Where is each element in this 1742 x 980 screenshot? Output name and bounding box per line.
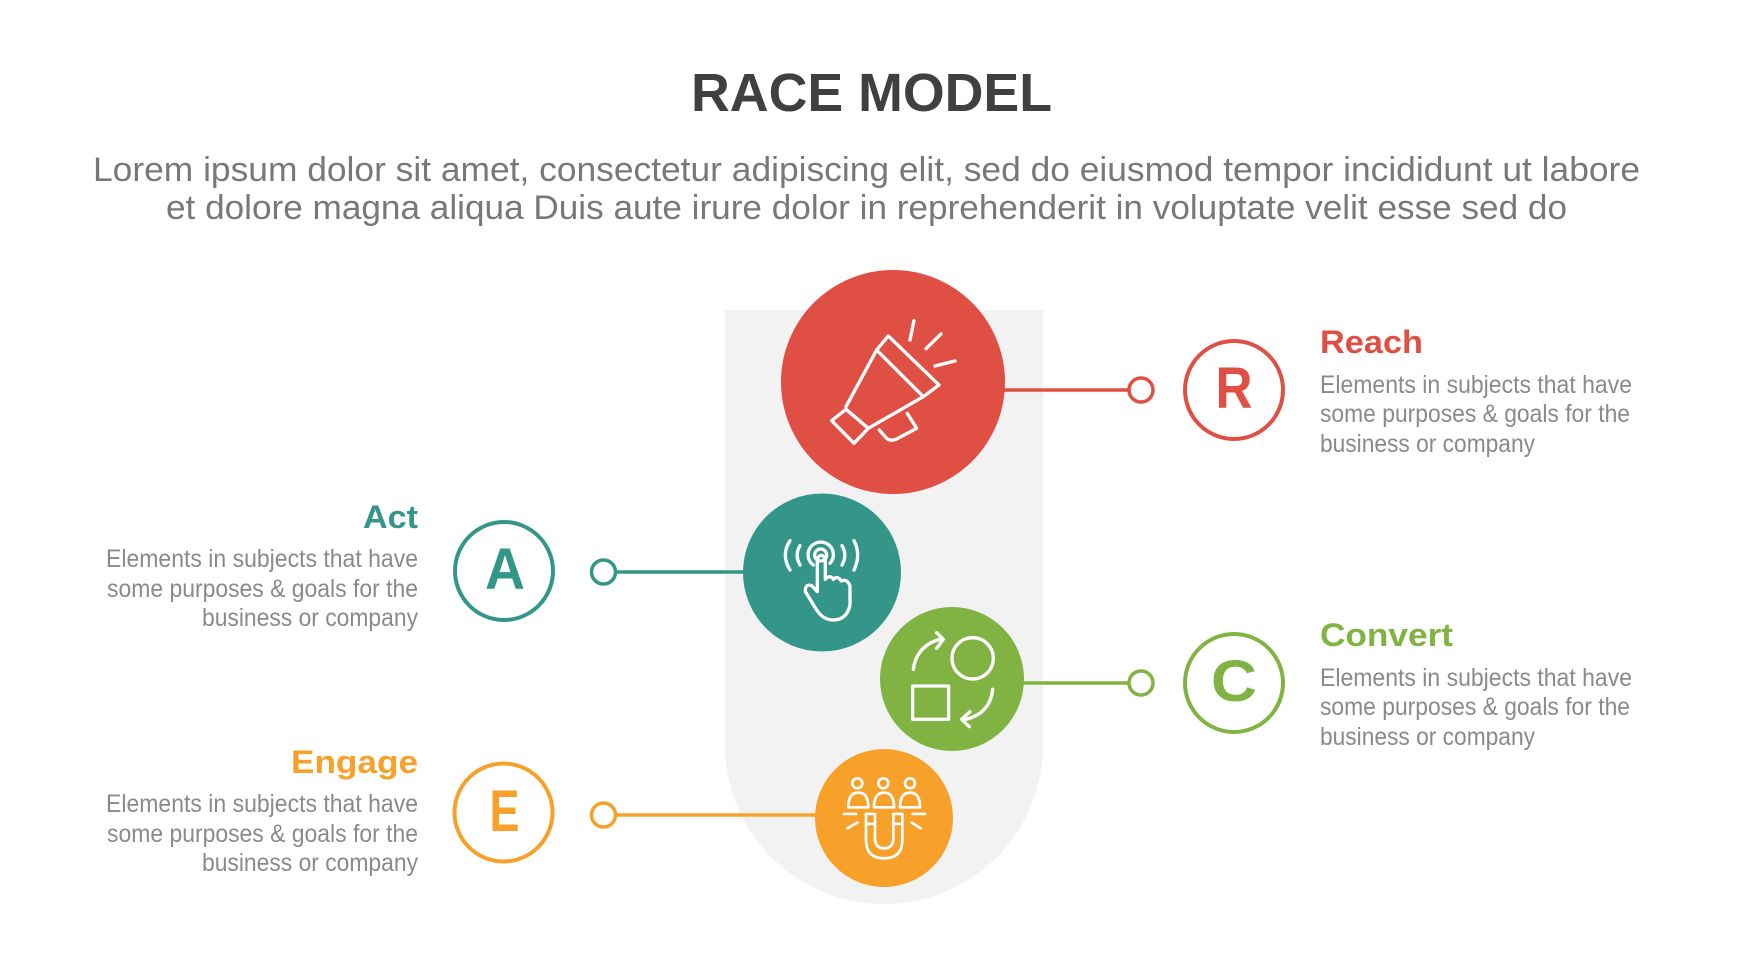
description: Act: business or company — [202, 604, 418, 632]
connector: convert — [1023, 671, 1153, 695]
letter badge: C — [1185, 634, 1283, 732]
description: Convert: some purposes & goals for the — [1320, 693, 1630, 721]
step: Act — [106, 494, 901, 652]
step: Convert — [880, 607, 1632, 751]
description: Engage: Elements in subjects that have — [106, 790, 418, 818]
letter badge: A: A — [485, 537, 525, 602]
icon: tap hand — [785, 541, 858, 620]
connector: engage — [592, 803, 816, 827]
description: Engage: some purposes & goals for the — [107, 820, 418, 848]
description: Convert: business or company — [1320, 723, 1535, 751]
description: Reach — [1320, 371, 1632, 458]
description: Act: some purposes & goals for the — [107, 575, 418, 603]
icon: shapes with cycle arrows — [913, 633, 993, 727]
subtitle text — [93, 151, 1640, 227]
circle: engage icon — [815, 749, 953, 887]
circle: convert icon — [880, 607, 1024, 751]
letter badge: E: E — [490, 779, 520, 844]
description: Engage: business or company — [202, 849, 418, 877]
step: Reach — [781, 270, 1632, 494]
connector: reach — [1004, 378, 1153, 402]
letter badge: E — [454, 764, 552, 862]
letter badge: R: R — [1216, 356, 1252, 421]
circle: reach icon — [781, 270, 1005, 494]
heading: Engage: Engage — [291, 744, 418, 780]
letter badge: A — [455, 522, 553, 620]
description: Reach: some purposes & goals for the — [1320, 400, 1630, 428]
letter badge: R — [1185, 341, 1283, 439]
subtitle text: et dolore magna aliqua Duis aute irure dolor in reprehenderit in voluptate velit esse sed do — [166, 189, 1567, 227]
description: Convert: Elements in subjects that have — [1320, 664, 1632, 692]
heading: Reach: Reach — [1320, 324, 1423, 360]
description: Engage — [106, 790, 418, 877]
description: Convert — [1320, 664, 1632, 751]
description: Reach: business or company — [1320, 430, 1535, 458]
heading: Convert: Convert — [1320, 617, 1453, 653]
description: Act: Elements in subjects that have — [106, 545, 418, 573]
connector: act — [592, 560, 744, 584]
description: Reach: Elements in subjects that have — [1320, 371, 1632, 399]
title: RACE MODEL — [691, 63, 1052, 123]
heading: Act: Act — [363, 499, 418, 535]
icon: megaphone — [832, 321, 955, 443]
icon: magnet attracting people — [844, 778, 925, 858]
description: Act — [106, 545, 418, 632]
step: Engage — [106, 744, 953, 887]
circle: act icon — [743, 494, 901, 652]
central capsule background — [725, 310, 1043, 904]
letter badge: C: C — [1211, 649, 1257, 714]
subtitle text: Lorem ipsum dolor sit amet, consectetur adipiscing elit, sed do eiusmod tempor incididunt ut labore — [93, 151, 1640, 189]
